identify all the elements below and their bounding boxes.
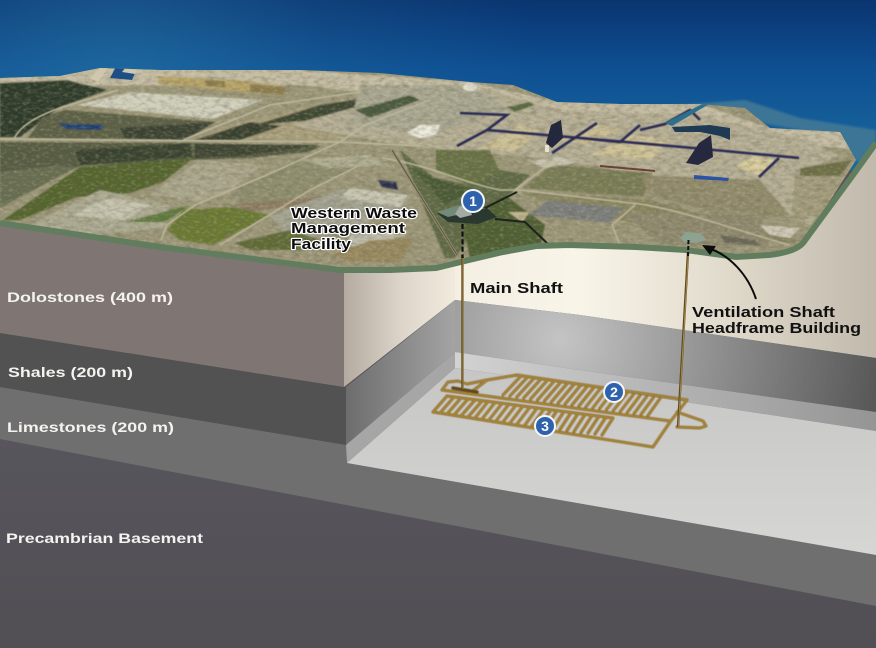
label: Ventilation Shaft Headframe Building: Ventilation Shaft xyxy=(692,305,835,321)
tunnels: under-stroke xyxy=(433,375,706,447)
main shaft building xyxy=(455,206,472,218)
vegetation south-east xyxy=(720,235,762,246)
marker 2 xyxy=(604,382,624,402)
marker 1: 1 xyxy=(469,193,477,209)
layer: shales band xyxy=(0,333,346,445)
building yard xyxy=(270,190,410,242)
sandy plots xyxy=(590,135,670,160)
northern plant area xyxy=(290,90,856,225)
red building xyxy=(600,166,655,171)
rail line xyxy=(392,150,457,255)
green strip xyxy=(506,102,535,112)
shallow water along the shoreline xyxy=(640,100,876,165)
ventilation shaft xyxy=(678,240,688,427)
repository floor xyxy=(347,368,876,555)
conveyors and ducts xyxy=(457,110,799,177)
shale wall back xyxy=(455,300,876,412)
label: Dolostones: Dolostones (400 m) xyxy=(7,289,173,305)
forest lower xyxy=(3,158,193,220)
blue roof xyxy=(694,175,729,181)
lagoon inlet xyxy=(110,68,137,80)
label: Ventilation Shaft Headframe Building xyxy=(692,305,861,337)
arrow to ventilation shaft headframe xyxy=(702,245,756,299)
marker 3: 3 xyxy=(541,418,549,434)
plant switchyard xyxy=(77,92,263,119)
heavy drift near main shaft xyxy=(453,388,477,392)
label: Limestones: Limestones (200 m) xyxy=(7,419,174,435)
water inlet xyxy=(665,104,708,126)
forest bands xyxy=(0,141,320,172)
label: Main Shaft: Main Shaft xyxy=(470,281,563,297)
limestone wall back xyxy=(455,352,876,431)
excavated cutaway xyxy=(344,143,876,555)
fields middle xyxy=(436,150,500,186)
ventilation pad xyxy=(680,232,707,243)
tree patch xyxy=(167,207,270,245)
forest west xyxy=(0,80,107,137)
limestone wall side xyxy=(346,352,455,463)
field with pond xyxy=(28,110,215,140)
white storage tanks xyxy=(407,125,440,138)
layer: dolostones band xyxy=(0,223,344,387)
layer: Precambrian basement xyxy=(0,430,876,648)
bedrock layers xyxy=(0,223,876,648)
station buildings xyxy=(158,76,283,92)
pier xyxy=(90,68,137,82)
tunnels: light centre stroke xyxy=(433,375,706,447)
aerial photo of the site xyxy=(0,60,876,275)
underground repository tunnels xyxy=(433,375,706,447)
label: Western Waste Management Facility: Western Waste xyxy=(291,206,417,222)
surface edge band xyxy=(0,143,876,270)
marker 2: 2 xyxy=(610,384,618,400)
white tank top xyxy=(463,83,477,91)
main shaft pad xyxy=(437,205,497,224)
cutaway left wall xyxy=(344,264,455,387)
layer: limestones band xyxy=(0,387,876,606)
roads xyxy=(0,90,790,245)
rail corridor and forest xyxy=(400,150,530,258)
marker 3 xyxy=(535,416,555,436)
label: Ventilation Shaft Headframe Building: Headframe Building xyxy=(692,321,861,337)
waste pond xyxy=(529,200,624,223)
cutaway right wall xyxy=(455,143,876,358)
settling channel xyxy=(672,125,730,140)
generating towers xyxy=(546,120,563,148)
main shaft xyxy=(461,224,464,389)
label: Western Waste Management Facility: Management xyxy=(291,221,405,237)
background: lake xyxy=(0,0,876,170)
access road black xyxy=(485,192,550,246)
shoreline sand strip xyxy=(0,68,855,150)
industrial yards xyxy=(150,160,262,202)
pond xyxy=(57,123,105,130)
label: Shales: Shales (200 m) xyxy=(8,364,133,380)
texture xyxy=(0,60,876,275)
label: Precambrian Basement: Precambrian Basement xyxy=(6,530,203,546)
shale wall side xyxy=(346,300,455,445)
central fields xyxy=(200,100,346,141)
label: Western Waste Management Facility xyxy=(291,206,417,253)
label: Western Waste Management Facility: Facility xyxy=(291,237,351,253)
marker 1 xyxy=(462,190,484,212)
